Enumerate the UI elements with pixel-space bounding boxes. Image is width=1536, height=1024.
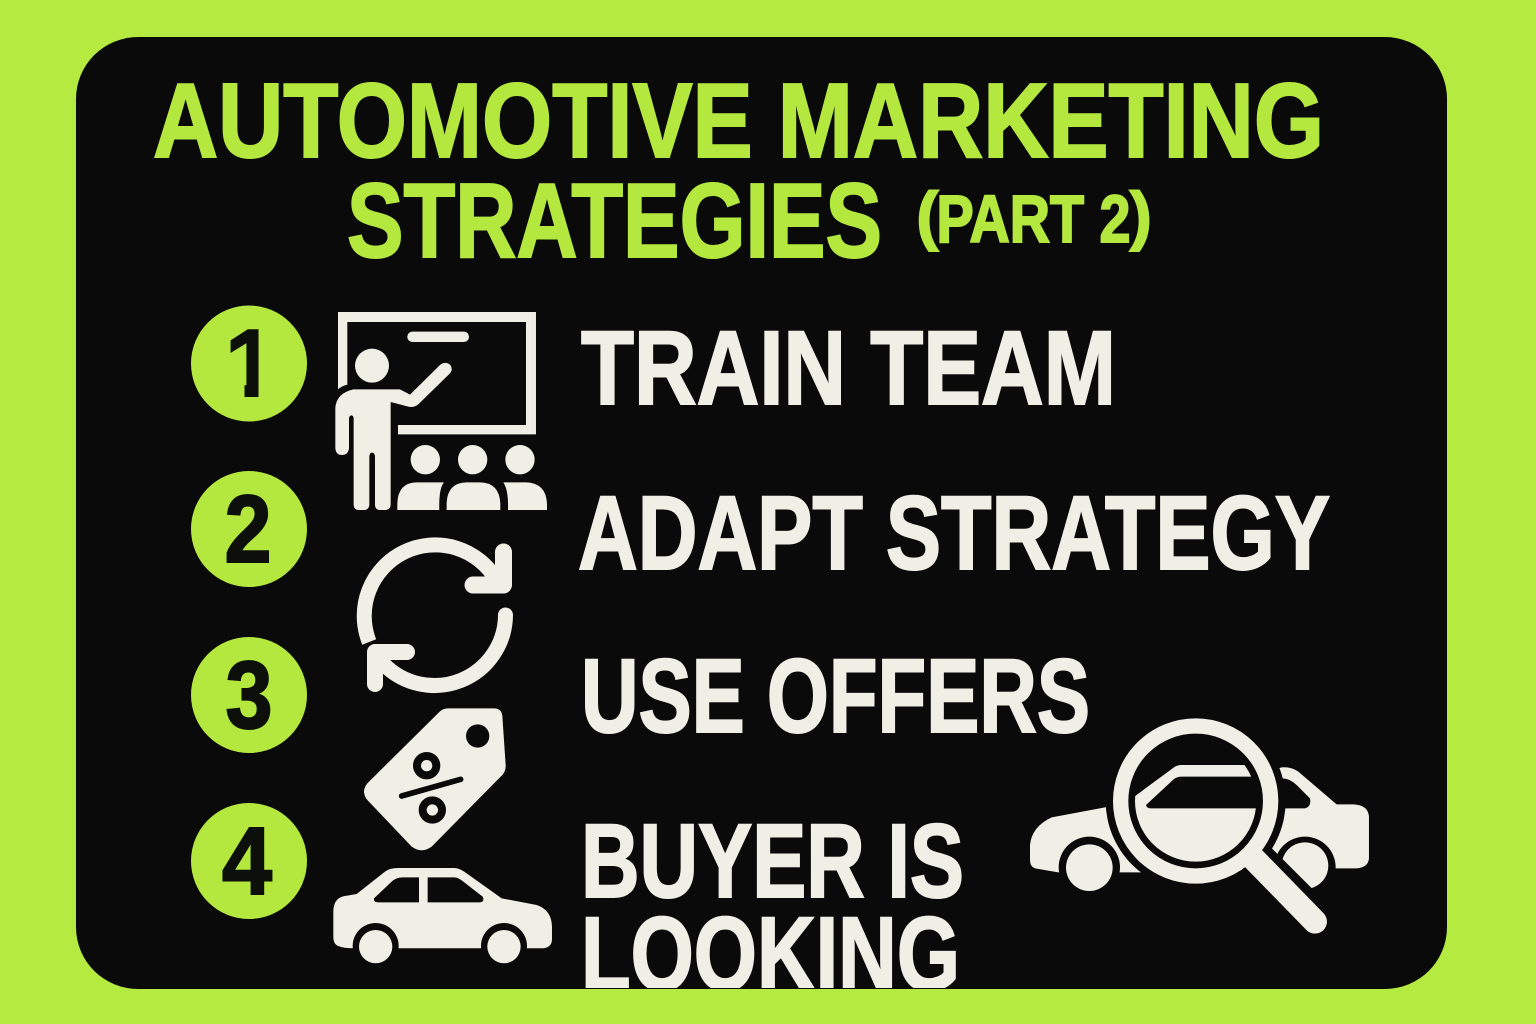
icon: refresh arrows	[364, 545, 506, 686]
badge 4: 4	[222, 808, 272, 915]
subtitle part 2: PART 2	[936, 182, 1130, 257]
badge 1	[191, 306, 307, 422]
label: use offers: USE OFFERS	[581, 638, 1090, 755]
label: looking: LOOKING	[581, 896, 960, 1013]
title line 1: AUTOMOTIVE MARKETING	[153, 62, 1324, 180]
icon: discount tag	[364, 708, 506, 850]
badge 3: 3	[226, 642, 272, 749]
number badges	[191, 306, 307, 919]
label: train team: TRAIN TEAM	[581, 310, 1116, 427]
icon: car under magnifying glass	[1030, 711, 1369, 922]
badge 2	[191, 471, 307, 587]
badge 3	[191, 637, 307, 753]
badge 2: 2	[224, 476, 272, 583]
icon: trainer at board with audience	[335, 312, 547, 510]
icon: car	[333, 868, 552, 969]
label: buyer is: BUYER IS	[581, 803, 964, 920]
badge 1: 1	[225, 310, 278, 417]
title	[153, 62, 1324, 280]
step labels	[578, 310, 1330, 1013]
subtitle part 2: (	[916, 178, 938, 252]
title line 2: STRATEGIES	[347, 162, 882, 280]
badge 4	[191, 803, 307, 919]
subtitle part 2: )	[1130, 178, 1152, 252]
label: adapt strategy: ADAPT STRATEGY	[578, 475, 1330, 592]
